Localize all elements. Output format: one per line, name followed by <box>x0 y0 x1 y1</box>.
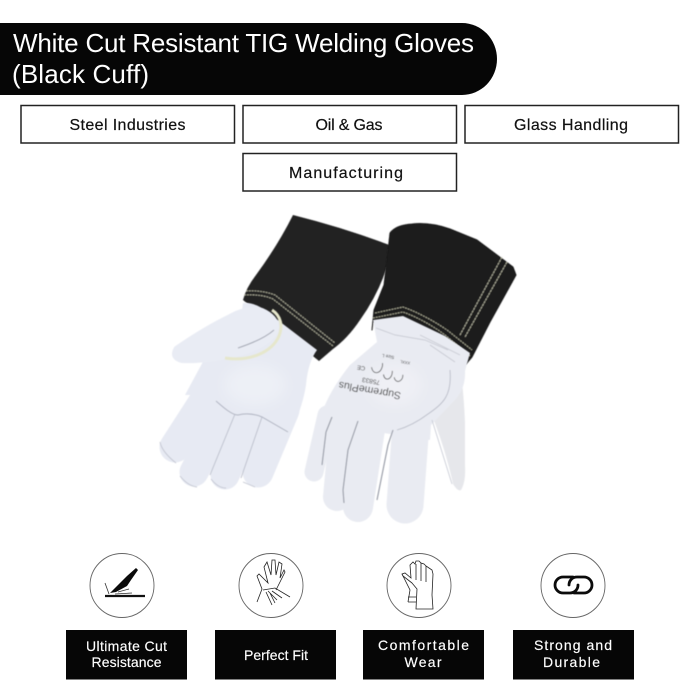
icon: pair of gloves outline <box>387 554 451 618</box>
title banner: (Black Cuff) <box>12 59 149 89</box>
product photo: pair of gloves <box>160 215 516 507</box>
industry tag: Glass Handling <box>465 106 678 143</box>
title banner <box>0 23 497 95</box>
feature: Comfortable Wear <box>363 554 484 680</box>
feature: Strong and Durable <box>513 554 634 680</box>
icon: hand being measured at the wrist <box>239 554 303 618</box>
right glove <box>314 224 516 507</box>
industry tag: Oil & Gas <box>243 106 456 143</box>
right glove white hand and fingers <box>314 316 470 507</box>
label: Comfortable Wear: Comfortable <box>378 637 469 653</box>
label: Comfortable Wear: Wear <box>404 654 442 670</box>
glove brand print: SupremePlus <box>338 379 402 401</box>
right glove black cuff <box>372 224 516 364</box>
icon: chain link <box>541 554 605 618</box>
industry tag: Steel Industries <box>21 106 234 143</box>
industry tag: Steel Industries: Steel Industries <box>70 117 186 134</box>
industry tag: Manufacturing <box>243 154 456 191</box>
glove brand print: 75833 <box>361 375 381 386</box>
glove brand print <box>338 353 411 401</box>
label: Ultimate Cut Resistance: Ultimate Cut <box>86 638 167 654</box>
label: Strong and Durable <box>513 630 634 680</box>
label: Ultimate Cut Resistance: Resistance <box>92 654 162 670</box>
glove brand print: Size L <box>381 353 395 360</box>
label: Comfortable Wear <box>363 630 484 680</box>
label: Strong and Durable: Durable <box>543 654 600 670</box>
icon: knife cutting on surface <box>90 554 154 618</box>
glove brand print: CE <box>357 363 366 371</box>
industry tag: Oil & Gas: Oil & Gas <box>316 117 382 134</box>
label: Ultimate Cut Resistance <box>66 630 187 680</box>
left glove black cuff <box>243 215 392 361</box>
industry tag: Manufacturing: Manufacturing <box>289 165 403 182</box>
left glove <box>160 215 392 488</box>
title banner: White Cut Resistant TIG Welding Gloves <box>13 28 474 58</box>
feature: Perfect Fit <box>215 554 336 680</box>
glove brand print: XXXL <box>399 359 411 366</box>
feature: Ultimate Cut Resistance <box>66 554 187 680</box>
label: Strong and Durable: Strong and <box>534 637 612 653</box>
left glove white palm and fingers <box>160 303 317 488</box>
label: Perfect Fit: Perfect Fit <box>244 647 308 663</box>
industry tag: Glass Handling: Glass Handling <box>514 117 628 134</box>
